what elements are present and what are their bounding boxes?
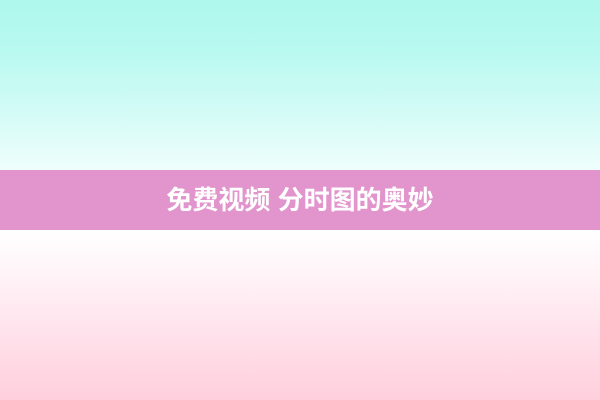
title: 免费视频 分时图的奥妙 [166, 185, 434, 215]
title band [0, 170, 600, 230]
